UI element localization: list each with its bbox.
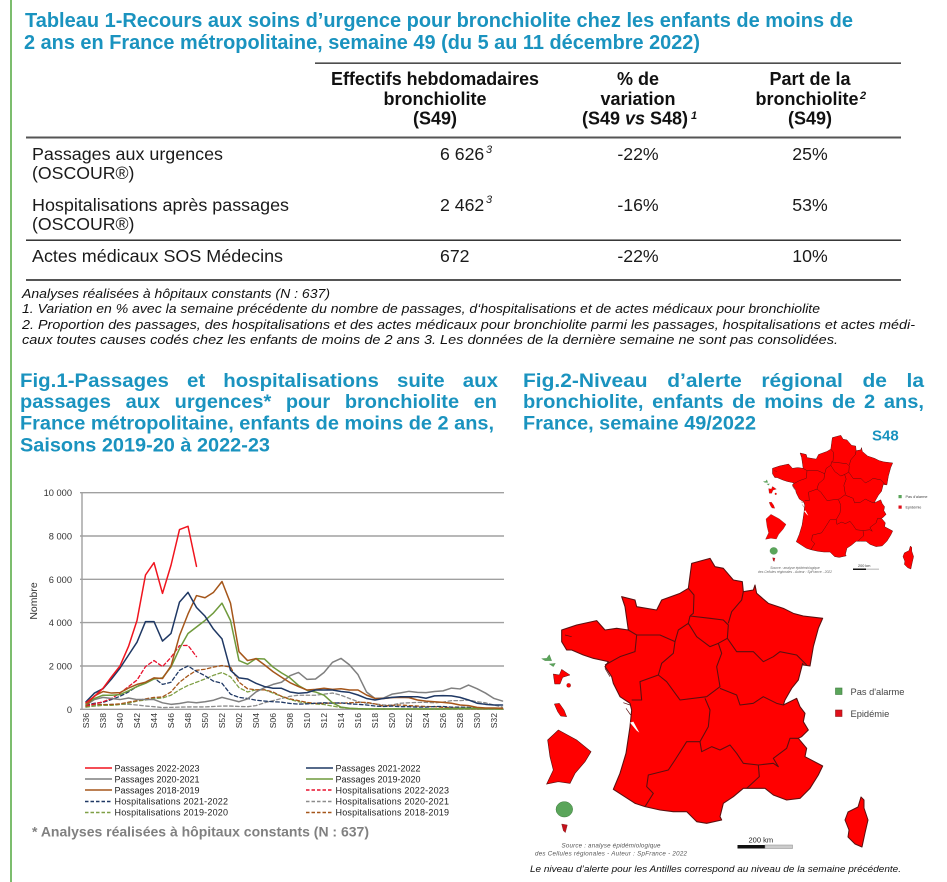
inset legend: Epidémie — [906, 506, 921, 510]
row: hospitalisations: 3 — [486, 194, 493, 206]
Corsica — [845, 797, 868, 847]
table header: effectifs: bronchiolite — [384, 89, 486, 109]
row: passages aux urgences: -22% — [617, 144, 659, 164]
row: passages aux urgences: 25% — [792, 144, 828, 164]
x axis labels: S32 — [489, 713, 499, 728]
x axis labels: S40 — [115, 713, 125, 728]
map legend: Epidémie — [850, 709, 889, 719]
x axis labels — [81, 713, 499, 728]
title: tableau 1: Tableau 1-Recours aux soins d’urgence pour bronchiolite chez les enfants de moins de — [25, 10, 853, 32]
table header: variation: (S49 vs S48) — [582, 108, 688, 128]
title: tableau 1: 2 ans en France métropolitaine, semaine 49 (du 5 au 11 décembre 2022) — [24, 32, 700, 54]
table header: variation: variation — [600, 89, 676, 109]
chart legend — [85, 764, 449, 818]
y axis labels: 8 000 — [49, 532, 72, 542]
row: hospitalisations: 53% — [792, 195, 828, 215]
row: sos medecins: -22% — [617, 246, 659, 266]
inset source and scale — [758, 564, 879, 574]
x axis labels: S22 — [404, 713, 414, 728]
x axis labels: S50 — [200, 713, 210, 728]
row: passages aux urgences — [32, 144, 828, 183]
chart legend: Passages 2021-2022 — [336, 764, 421, 774]
y axis labels: 6 000 — [49, 575, 72, 585]
dashed series: hospitalisations — [86, 645, 502, 709]
inset source and scale: 200 km — [858, 564, 870, 568]
chart legend: Passages 2020-2021 — [114, 774, 200, 784]
x axis labels: S10 — [302, 713, 312, 728]
inset legend — [898, 495, 928, 510]
row: passages aux urgences: 6 626 — [440, 144, 484, 164]
x axis labels: S12 — [319, 713, 329, 728]
x axis labels: S20 — [387, 713, 397, 728]
x axis labels: S36 — [81, 713, 91, 728]
heading: figure 2: France, semaine 49/2022 — [523, 412, 756, 434]
y axis labels: 4 000 — [49, 618, 72, 628]
chart footnote: * Analyses réalisées à hôpitaux constants (N : 637) — [32, 824, 369, 840]
table header: variation — [582, 69, 697, 128]
y axis labels — [44, 488, 72, 715]
table footnotes: caux toutes causes codés chez les enfants de moins de 2 ans 3. Les données de la dernière semaine ne sont pas consolidées. — [22, 332, 838, 347]
row: hospitalisations — [32, 194, 828, 234]
heading: figure 2: Fig.2-Niveau d’alerte régional de la — [523, 370, 925, 392]
table footnotes — [21, 286, 916, 347]
map caption: Le niveau d’alerte pour les Antilles correspond au niveau de la semaine précédente. — [530, 863, 901, 874]
map source — [535, 842, 688, 858]
x axis labels: S30 — [472, 713, 482, 728]
table footnotes: 1. Variation en % avec la semaine précédente du nombre de passages, d‘hospitalisations et de actes médicaux pour bronchiolite — [22, 301, 820, 316]
table header: part de la bronchiolite — [756, 69, 866, 128]
inset label S48: S48 — [872, 428, 899, 444]
inset map S48 — [758, 428, 928, 574]
x axis labels: S42 — [132, 713, 142, 728]
row: sos medecins: Actes médicaux SOS Médecins — [32, 246, 283, 266]
table footnotes: Analyses réalisées à hôpitaux constants (N : 637) — [21, 286, 330, 301]
row: passages aux urgences: (OSCOUR®) — [32, 163, 134, 183]
table footnotes: 2. Proportion des passages, des hospitalisations et des actes médicaux pour bronchiolite parmi les passages, hospitalisations et actes médi- — [21, 317, 916, 332]
inset source and scale: des Cellules régionales - Auteur : SpFrance - 2022 — [758, 570, 832, 574]
heading: figure 1 — [20, 370, 498, 456]
chart legend: Hospitalisations 2022-2023 — [336, 786, 449, 796]
row: sos medecins: 10% — [792, 246, 828, 266]
row: hospitalisations: -16% — [617, 195, 659, 215]
x axis labels: S14 — [336, 713, 346, 728]
x axis labels: S44 — [149, 713, 159, 728]
row: passages aux urgences: 3 — [486, 144, 493, 156]
map source: Source : analyse épidémiologique — [562, 842, 661, 850]
y axis labels: 0 — [67, 705, 72, 715]
x axis labels: S46 — [166, 713, 176, 728]
y axis labels: 10 000 — [44, 488, 72, 498]
x axis labels: S28 — [455, 713, 465, 728]
x axis labels: S24 — [421, 713, 431, 728]
line chart — [28, 488, 504, 728]
x axis labels: S26 — [438, 713, 448, 728]
map legend: Pas d'alarme — [850, 687, 904, 697]
heading: figure 1: Saisons 2019-20 à 2022-23 — [20, 434, 270, 456]
heading: figure 2 — [523, 370, 925, 434]
table header: effectifs — [331, 69, 539, 128]
y axis labels: 2 000 — [49, 662, 72, 672]
heading: figure 1: Fig.1-Passages et hospitalisations suite aux — [20, 370, 498, 392]
chart legend: Hospitalisations 2020-2021 — [336, 796, 449, 806]
table header: variation: 1 — [691, 110, 697, 122]
row: hospitalisations: (OSCOUR®) — [32, 214, 134, 234]
row: hospitalisations: 2 462 — [440, 195, 484, 215]
x axis labels: S52 — [217, 713, 227, 728]
heading: figure 2: bronchiolite, enfants de moins de 2 ans, — [523, 391, 924, 413]
table header: part de la bronchiolite: (S49) — [788, 108, 832, 128]
x axis labels: S08 — [285, 713, 295, 728]
green left margin line — [10, 0, 12, 882]
chart legend: Passages 2019-2020 — [336, 774, 421, 784]
row: sos medecins: 672 — [440, 246, 470, 266]
chart legend: Hospitalisations 2019-2020 — [114, 808, 228, 818]
map legend — [836, 687, 904, 719]
x axis labels: S38 — [98, 713, 108, 728]
table header: effectifs: Effectifs hebdomadaires — [331, 69, 539, 89]
title: tableau 1 — [24, 10, 853, 54]
chart legend: Hospitalisations 2018-2019 — [336, 808, 449, 818]
table — [26, 62, 901, 281]
inset source and scale: Source : analyse épidémiologique — [770, 566, 820, 570]
x axis labels: S04 — [251, 713, 261, 728]
table header: part de la bronchiolite: bronchiolite — [756, 89, 858, 109]
heading: figure 1: France métropolitaine, enfants de moins de 2 ans, — [20, 412, 494, 434]
chart legend: Passages 2022-2023 — [114, 764, 200, 774]
x axis labels: S02 — [234, 713, 244, 728]
x axis labels: S16 — [353, 713, 363, 728]
table header: part de la bronchiolite: Part de la — [769, 69, 852, 89]
map scale bar — [738, 836, 792, 848]
x axis labels: S48 — [183, 713, 193, 728]
table header: effectifs: (S49) — [413, 108, 457, 128]
chart legend: Hospitalisations 2021-2022 — [114, 796, 228, 806]
row: sos medecins — [32, 246, 828, 266]
table header: variation: % de — [617, 69, 659, 89]
x axis labels: S18 — [370, 713, 380, 728]
solid series: passages — [86, 526, 502, 709]
map scale bar: 200 km — [748, 836, 773, 844]
inset legend: Pas d'alarme — [906, 495, 928, 499]
main map of France — [542, 558, 823, 833]
y axis title: Nombre — [28, 582, 40, 620]
x axis labels: S06 — [268, 713, 278, 728]
row: hospitalisations: Hospitalisations après passages — [32, 195, 289, 215]
heading: figure 1: passages aux urgences* pour bronchiolite en — [20, 391, 497, 413]
table header: part de la bronchiolite: 2 — [859, 90, 866, 102]
row: passages aux urgences: Passages aux urgences — [32, 144, 223, 164]
map source: des Cellules régionales - Auteur : SpFrance - 2022 — [535, 850, 688, 858]
chart legend: Passages 2018-2019 — [114, 786, 200, 796]
